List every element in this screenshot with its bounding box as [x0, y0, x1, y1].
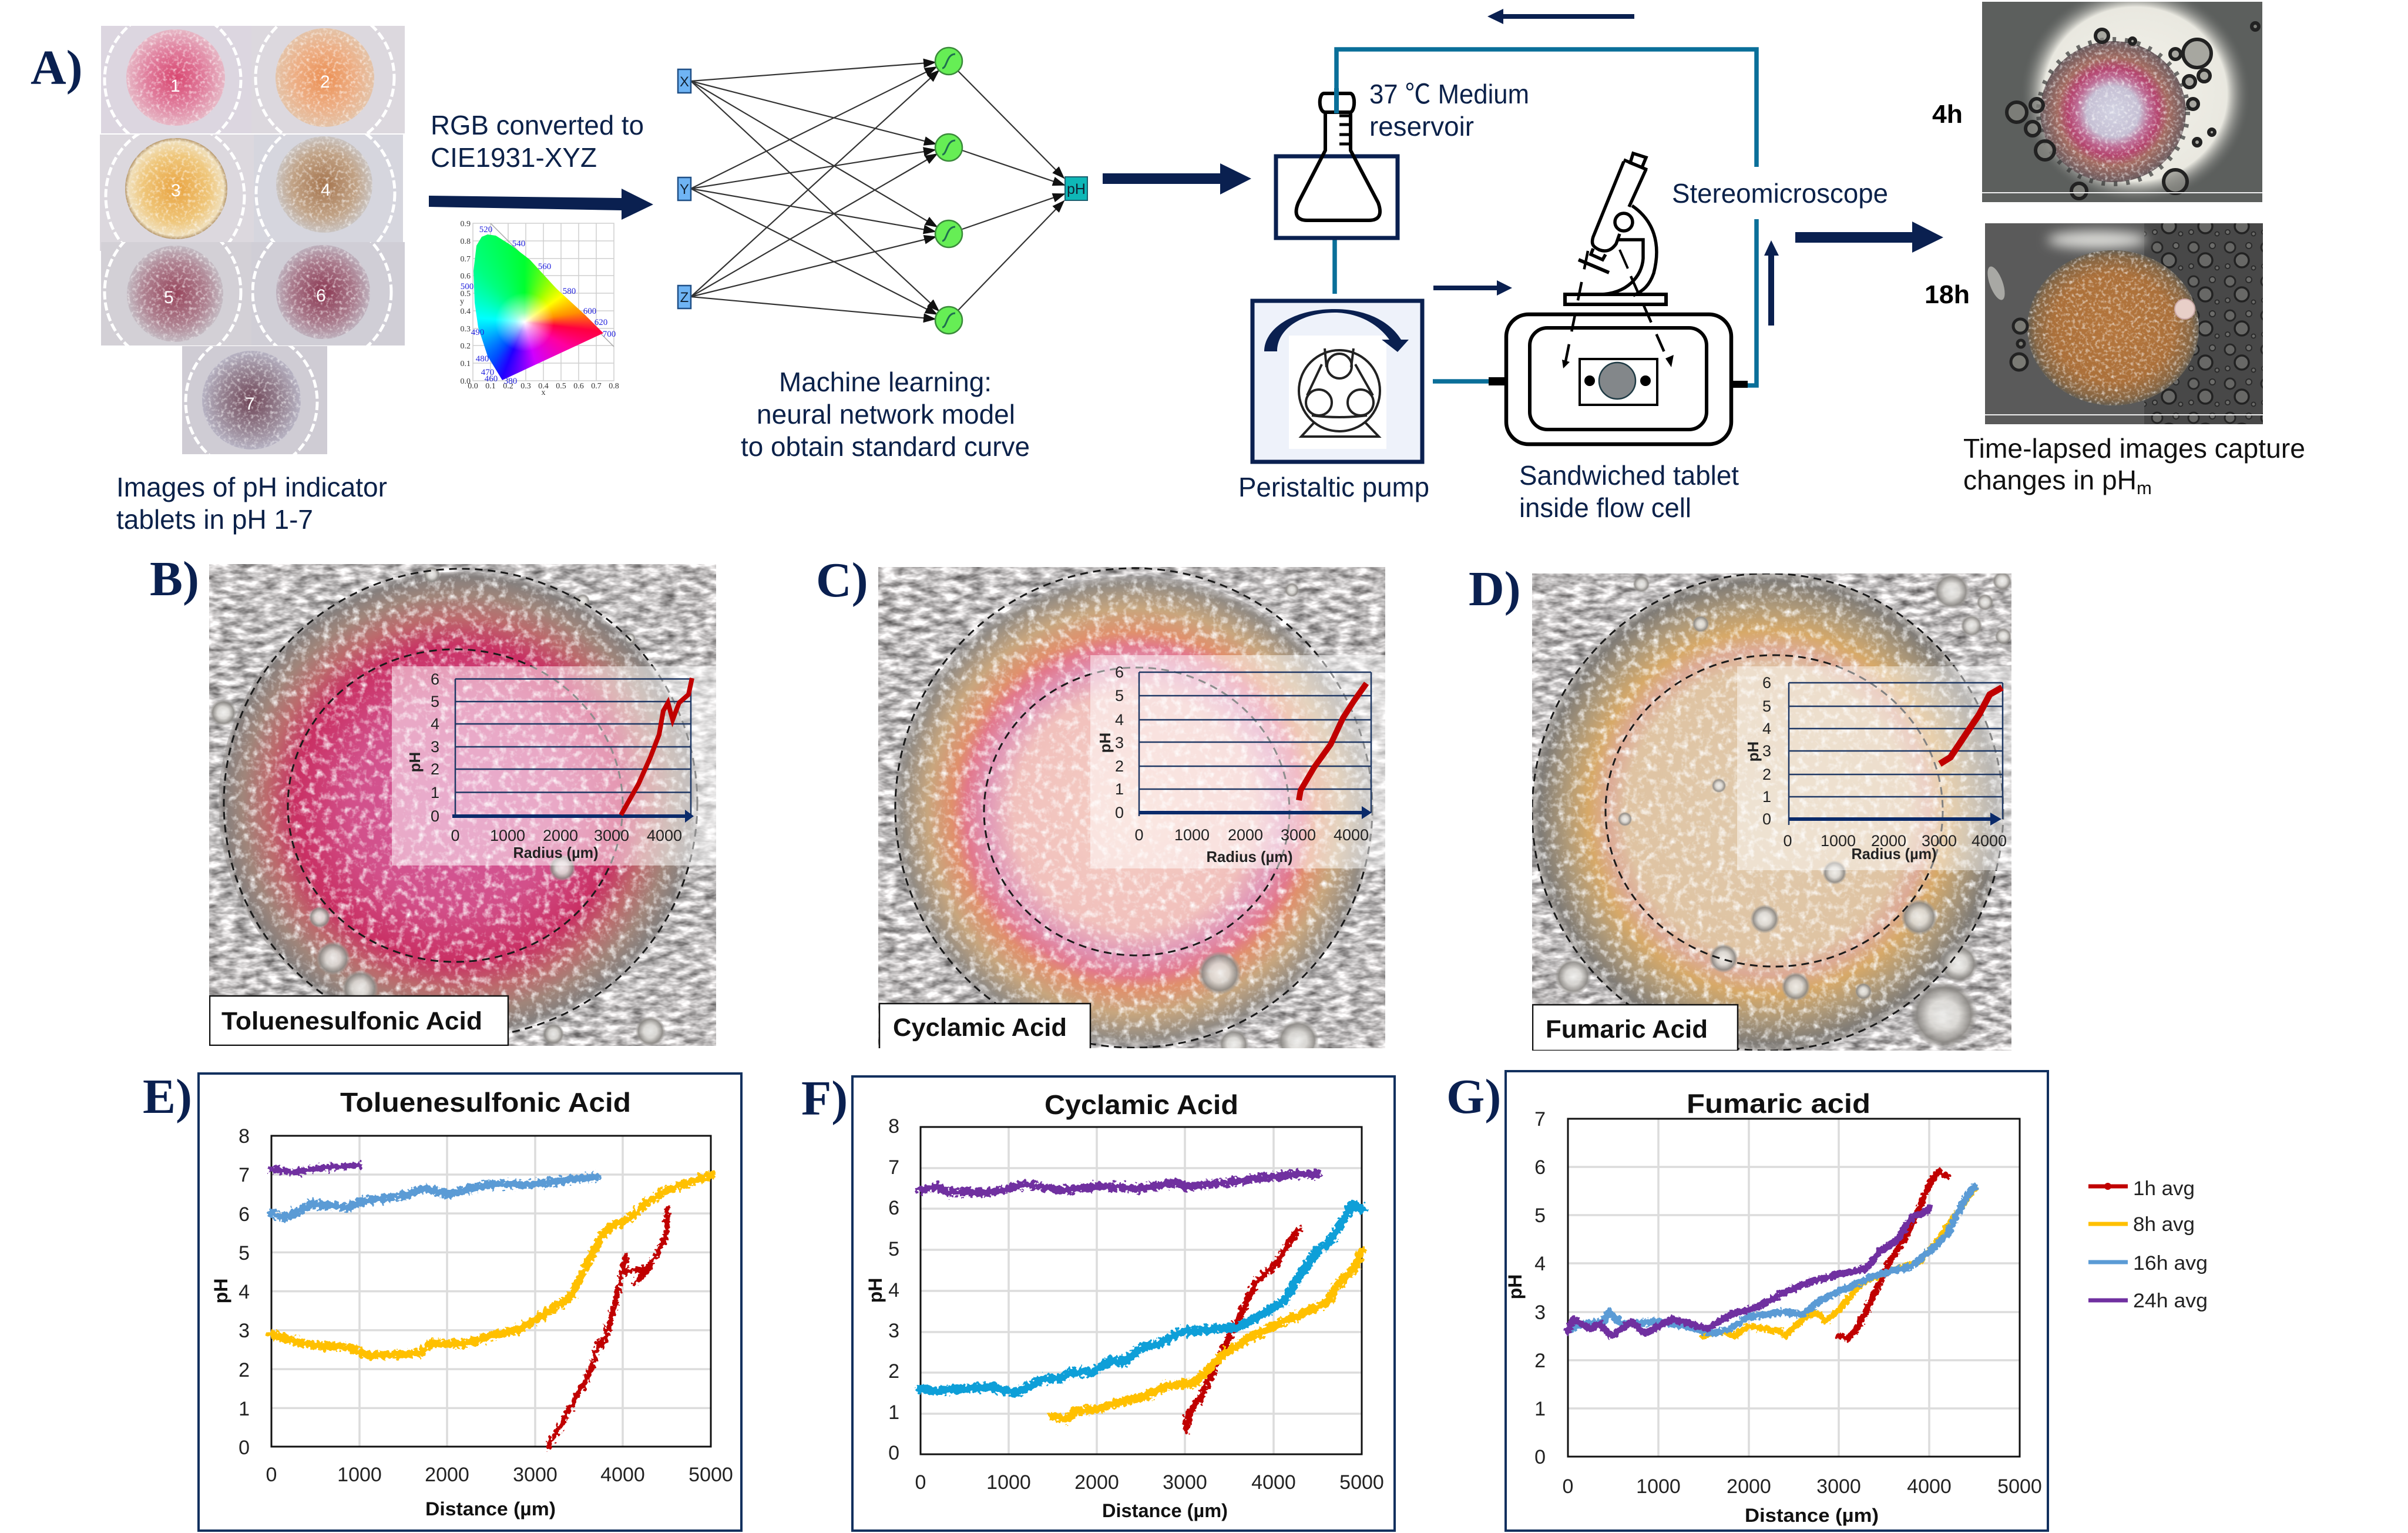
- inset pH profile: 2000: [543, 827, 578, 844]
- hidden nodes: [935, 48, 962, 334]
- photo background: [209, 564, 716, 1046]
- input node Z: Z: [680, 290, 689, 306]
- input node X: X: [680, 74, 689, 90]
- inset pH profile: 2000: [1228, 826, 1263, 844]
- inset pH profile: 1: [431, 784, 439, 801]
- chart F: cyclamic acid: [852, 1076, 1395, 1531]
- axis tick labels: 7: [239, 1164, 250, 1186]
- inset pH profile: 0: [1783, 832, 1792, 850]
- tablet image pH 1: [101, 26, 251, 133]
- arrowheads: light paths: [1562, 355, 1674, 368]
- panel A label: A): [31, 41, 83, 95]
- tablet image pH 7: [182, 333, 327, 471]
- inset pH profile: 6: [431, 670, 439, 688]
- axis tick labels: 6: [239, 1203, 250, 1226]
- caption: flow cell: Sandwiched tablet: [1519, 460, 1739, 491]
- chart: CIE 1931 chromaticity diagram: 0.6: [461, 272, 471, 281]
- inset pH profile: 6: [1115, 663, 1124, 681]
- arrow: upward flow: [1764, 240, 1779, 326]
- inset pH profile: Radius (µm): [1852, 845, 1936, 863]
- photo: 18h tablet: [1984, 223, 2263, 424]
- inset pH profile: 6: [1762, 674, 1771, 692]
- caption: time-lapse: changes in pH: [1963, 465, 2137, 495]
- axis tick labels: 1: [239, 1398, 250, 1420]
- bubbles: [1556, 572, 2011, 1048]
- inset pH profile: 3000: [1281, 826, 1316, 844]
- icon: peristaltic pump: [1252, 301, 1422, 462]
- axis tick labels: 2: [888, 1360, 899, 1383]
- icon: flask reservoir: [1276, 88, 1398, 238]
- inset pH profile: 1000: [490, 827, 525, 844]
- tablet image pH 6: [251, 220, 405, 364]
- dashed light paths: [1565, 251, 1668, 364]
- tablet image pH 3: 3: [171, 181, 181, 200]
- data curves: [1568, 1172, 1974, 1339]
- tablet: [219, 572, 698, 1036]
- chart: CIE 1931 chromaticity diagram: 560: [538, 262, 551, 271]
- inset pH profile: 2: [1762, 766, 1771, 783]
- caption: time-lapse: m: [2137, 478, 2152, 498]
- tubing: flow loop: [1335, 49, 1757, 385]
- axis tick labels: 1: [888, 1401, 899, 1424]
- inset pH profile: 0: [1115, 804, 1124, 821]
- inset pH profile: 3000: [594, 827, 629, 844]
- inset pH profile: 4000: [1334, 826, 1369, 844]
- inset pH profile: 4: [1115, 711, 1124, 729]
- dashed boundary circles: [224, 569, 697, 1038]
- chart E: toluenesulfonic acid: 3000: [513, 1464, 557, 1486]
- caption: time-lapse: Time-lapsed images capture: [1963, 433, 2305, 464]
- diagram: neural network: [678, 48, 1087, 334]
- chart G: fumaric acid: 5000: [1997, 1475, 2042, 1498]
- panel C label: C): [816, 553, 868, 608]
- arrow: return flow: [1487, 9, 1634, 24]
- caption: machine learning: Machine learning:: [779, 367, 992, 397]
- chart: CIE 1931 chromaticity diagram: 0.9: [461, 220, 471, 229]
- panel D: fumaric acid tablet: [1532, 572, 2011, 1051]
- tablet image pH 7: 7: [245, 394, 255, 414]
- chart: CIE 1931 chromaticity diagram: 0.2: [503, 382, 513, 391]
- caption: peristaltic pump: Peristaltic pump: [1238, 472, 1429, 502]
- photo background: [1532, 573, 2011, 1051]
- chart: CIE 1931 chromaticity diagram: 0.3: [520, 382, 531, 391]
- axis tick labels: 0: [239, 1437, 250, 1459]
- label box: [210, 996, 508, 1045]
- input node Y: Y: [680, 182, 689, 197]
- label box: Cyclamic Acid: [893, 1014, 1067, 1042]
- arrow: to time-lapsed images: [1795, 222, 1943, 253]
- chart: CIE 1931 chromaticity diagram: 0.4: [461, 307, 471, 316]
- chart F: cyclamic acid: pH: [865, 1278, 886, 1303]
- caption: flow cell: inside flow cell: [1519, 492, 1691, 523]
- bubbles: [1198, 583, 1318, 1061]
- caption: stereomicroscope: Stereomicroscope: [1672, 178, 1888, 209]
- axis tick labels: 6: [888, 1197, 899, 1219]
- chart: CIE 1931 chromaticity diagram: 0.2: [461, 342, 471, 351]
- inset pH profile: 0: [431, 807, 439, 825]
- arrow: tablets to network: [429, 189, 653, 220]
- caption: medium reservoir: reservoir: [1369, 111, 1474, 142]
- axis tick labels: 2: [239, 1359, 250, 1381]
- axis tick labels: 4: [888, 1279, 899, 1301]
- inset pH profile: 5: [1762, 697, 1771, 715]
- label box: [879, 1004, 1090, 1051]
- axis tick labels: 8: [888, 1115, 899, 1138]
- inset pH profile: [1090, 655, 1385, 868]
- inset pH profile: 3: [1115, 734, 1124, 752]
- caption: machine learning: neural network model: [757, 399, 1015, 430]
- chart: CIE 1931 chromaticity diagram: [460, 220, 619, 397]
- axis tick labels: 7: [888, 1156, 899, 1179]
- axis tick labels: 3: [888, 1320, 899, 1342]
- chart: CIE 1931 chromaticity diagram: 0.5: [556, 382, 566, 391]
- chart: CIE 1931 chromaticity diagram: 0.8: [461, 237, 471, 246]
- chart E: toluenesulfonic acid: pH: [210, 1279, 231, 1303]
- tablet: [894, 576, 1373, 1046]
- chart: CIE 1931 chromaticity diagram: 500: [461, 282, 473, 291]
- chart E: toluenesulfonic acid: 5000: [689, 1464, 733, 1486]
- legend: [2088, 1178, 2208, 1312]
- output node pH: [1065, 177, 1087, 200]
- caption: tablet images: Images of pH indicator: [116, 472, 387, 502]
- inset pH profile: pH: [1744, 742, 1762, 762]
- chart: CIE 1931 chromaticity diagram: 490: [471, 328, 484, 337]
- axis tick labels: 6: [1534, 1156, 1546, 1179]
- inset pH profile: 4000: [647, 827, 682, 844]
- inset pH profile: 2: [431, 760, 439, 778]
- chart F: cyclamic acid: Distance (µm): [1102, 1500, 1228, 1521]
- inset pH profile: [392, 666, 716, 866]
- data curves: [921, 1174, 1362, 1430]
- inset pH profile: 3: [1762, 742, 1771, 760]
- chart: CIE 1931 chromaticity diagram: 0.4: [538, 382, 549, 391]
- tablet image pH 4: [254, 135, 403, 242]
- inset pH profile: 4000: [1972, 832, 2007, 850]
- icon: flow cell: [1489, 314, 1748, 444]
- axis tick labels: 3: [239, 1320, 250, 1342]
- label box: Fumaric Acid: [1546, 1015, 1708, 1044]
- panel B: toluenesulfonic acid tablet: [209, 564, 716, 1046]
- tablet image pH 2: 2: [320, 72, 330, 92]
- arrow: pump to flow cell: [1433, 280, 1512, 296]
- caption: RGB conversion: CIE1931-XYZ: [431, 142, 597, 173]
- title: Fumaric acid: [1687, 1088, 1870, 1119]
- inset pH profile: 5: [431, 693, 439, 710]
- panel: pH indicator tablet images: [100, 7, 405, 471]
- inset pH profile: pH: [406, 752, 424, 772]
- inset pH profile: pH: [1096, 733, 1114, 753]
- tablet image pH 4: 4: [321, 180, 331, 200]
- chart: CIE 1931 chromaticity diagram: 520: [479, 225, 492, 234]
- legend: 1h avg: 1h avg: [2133, 1178, 2195, 1200]
- panel G label: G): [1446, 1069, 1501, 1124]
- chart F: cyclamic acid: 2000: [1074, 1471, 1119, 1494]
- panel C: cyclamic acid tablet: [878, 567, 1385, 1061]
- chart: CIE 1931 chromaticity diagram: 480: [476, 354, 489, 364]
- inset pH profile: 1: [1762, 788, 1771, 806]
- chart: CIE 1931 chromaticity diagram: 0.8: [609, 382, 619, 391]
- input node Y: [678, 177, 691, 200]
- inset pH profile: 2000: [1871, 832, 1906, 850]
- axis tick labels: 5: [888, 1238, 899, 1260]
- inset pH profile: 0: [451, 827, 460, 844]
- chart G: fumaric acid: pH: [1504, 1274, 1526, 1299]
- axis tick labels: 7: [1534, 1108, 1546, 1131]
- legend: 8h avg: 8h avg: [2133, 1213, 2195, 1236]
- chart: CIE 1931 chromaticity diagram: 0.1: [461, 360, 471, 368]
- inset pH profile: 0: [1134, 826, 1144, 844]
- chart: CIE 1931 chromaticity diagram: 0.5: [461, 290, 471, 298]
- tablet image pH 1: 1: [170, 76, 180, 96]
- inset pH profile: Radius (µm): [1207, 848, 1292, 866]
- axis tick labels: 4: [1534, 1253, 1546, 1275]
- chart: CIE 1931 chromaticity diagram: 460: [485, 374, 498, 384]
- icon: stereomicroscope: [1565, 153, 1666, 304]
- chart E: toluenesulfonic acid: 4000: [600, 1464, 645, 1486]
- arrow: network to setup: [1103, 163, 1251, 194]
- chart: CIE 1931 chromaticity diagram: 600: [583, 307, 596, 316]
- legend: 1h avg: [2088, 1178, 2195, 1200]
- input node X: [678, 69, 691, 93]
- label box: Toluenesulfonic Acid: [221, 1007, 482, 1035]
- inset pH profile: 0: [1762, 810, 1771, 828]
- input node Z: [678, 286, 691, 308]
- bubbles: [210, 566, 665, 1046]
- caption: tablet images: tablets in pH 1-7: [116, 504, 313, 535]
- inset pH profile: 1: [1115, 780, 1124, 798]
- inset pH profile: 4: [1762, 720, 1771, 737]
- photo: 4h tablet: [1982, 0, 2262, 203]
- title: Toluenesulfonic Acid: [340, 1087, 631, 1118]
- axis tick labels: 4: [239, 1281, 250, 1303]
- chart: CIE 1931 chromaticity diagram: 0.0: [461, 377, 471, 386]
- chart: CIE 1931 chromaticity diagram: 0.7: [591, 382, 602, 391]
- chart F: cyclamic acid: 0: [915, 1471, 926, 1494]
- tablet image pH 5: [101, 242, 251, 345]
- panel F label: F): [801, 1071, 848, 1126]
- dashed boundary circles: [1532, 573, 2003, 1051]
- chart G: fumaric acid: 2000: [1727, 1475, 1771, 1498]
- caption: medium reservoir: 37 ℃ Medium: [1369, 79, 1529, 109]
- tablet image pH 2: [251, 26, 405, 133]
- chart E: toluenesulfonic acid: 0: [266, 1464, 277, 1486]
- panel B label: B): [150, 552, 199, 606]
- tablet: [1532, 573, 2003, 1051]
- inset pH profile: 2: [1115, 757, 1124, 775]
- axis tick labels: 1: [1534, 1398, 1546, 1420]
- inset pH profile: 3: [431, 738, 439, 756]
- axis tick labels: 0: [888, 1442, 899, 1464]
- chart E: toluenesulfonic acid: [199, 1074, 741, 1531]
- axis tick labels: 3: [1534, 1301, 1546, 1324]
- chart E: toluenesulfonic acid: 2000: [425, 1464, 469, 1486]
- axis tick labels: 5: [239, 1242, 250, 1264]
- chart: CIE 1931 chromaticity diagram: 540: [512, 239, 525, 249]
- panel D label: D): [1469, 562, 1521, 616]
- chart: CIE 1931 chromaticity diagram: x: [542, 388, 545, 397]
- chart: CIE 1931 chromaticity diagram: 0.7: [461, 255, 471, 264]
- chart G: fumaric acid: 4000: [1907, 1475, 1952, 1498]
- caption: RGB conversion: RGB converted to: [431, 110, 644, 140]
- chart: CIE 1931 chromaticity diagram: 470: [481, 368, 494, 377]
- chart G: fumaric acid: Distance (µm): [1745, 1505, 1879, 1526]
- axis tick labels: 5: [1534, 1205, 1546, 1227]
- title: Cyclamic Acid: [1045, 1089, 1238, 1120]
- tablet image pH 6: 6: [316, 286, 326, 306]
- tablet image pH 3: [100, 135, 254, 251]
- inset pH profile: 4: [431, 715, 439, 733]
- chart E: toluenesulfonic acid: Distance (µm): [425, 1498, 556, 1519]
- chart: CIE 1931 chromaticity diagram: 580: [563, 287, 576, 296]
- legend: 16h avg: 16h avg: [2133, 1252, 2208, 1274]
- inset pH profile: 5: [1115, 687, 1124, 705]
- inset pH profile: [1737, 666, 2011, 870]
- label box: [1533, 1005, 1738, 1051]
- inset pH profile: 1000: [1821, 832, 1856, 850]
- panel E label: E): [143, 1069, 192, 1124]
- chart: CIE 1931 chromaticity diagram: y: [460, 297, 464, 306]
- chart: CIE 1931 chromaticity diagram: 0.0: [468, 382, 478, 391]
- data curves: [271, 1165, 711, 1447]
- inset pH profile: 1000: [1174, 826, 1210, 844]
- output node pH: pH: [1067, 181, 1086, 197]
- chart F: cyclamic acid: 1000: [986, 1471, 1031, 1494]
- chart: CIE 1931 chromaticity diagram: 700: [603, 330, 616, 339]
- caption: machine learning: to obtain standard curve: [741, 431, 1030, 462]
- chart G: fumaric acid: 1000: [1636, 1475, 1681, 1498]
- chart: CIE 1931 chromaticity diagram: 620: [595, 318, 607, 327]
- axis tick labels: 0: [1534, 1446, 1546, 1468]
- axis tick labels: 8: [239, 1125, 250, 1148]
- chart F: cyclamic acid: 4000: [1251, 1471, 1296, 1494]
- axis tick labels: 2: [1534, 1350, 1546, 1372]
- dashed boundary circles: [895, 568, 1372, 1048]
- legend: 24h avg: 24h avg: [2133, 1290, 2208, 1312]
- chart G: fumaric acid: 3000: [1816, 1475, 1861, 1498]
- chart F: cyclamic acid: 3000: [1163, 1471, 1207, 1494]
- photo background: [878, 567, 1385, 1048]
- chart: CIE 1931 chromaticity diagram: 0.3: [461, 325, 471, 334]
- label: 18h: 18h: [1925, 280, 1970, 309]
- chart: CIE 1931 chromaticity diagram: 0.1: [485, 382, 496, 391]
- chart: CIE 1931 chromaticity diagram: 380: [504, 377, 517, 386]
- chart G: fumaric acid: 0: [1563, 1475, 1573, 1498]
- label: 4h: 4h: [1932, 100, 1963, 129]
- chart: CIE 1931 chromaticity diagram: 0.6: [573, 382, 584, 391]
- inset pH profile: Radius (µm): [513, 844, 598, 861]
- tablet image pH 5: 5: [164, 288, 174, 307]
- chart F: cyclamic acid: 5000: [1339, 1471, 1384, 1494]
- chart E: toluenesulfonic acid: 1000: [337, 1464, 382, 1486]
- chart G: fumaric acid: [1504, 1071, 2048, 1531]
- inset pH profile: 3000: [1922, 832, 1957, 850]
